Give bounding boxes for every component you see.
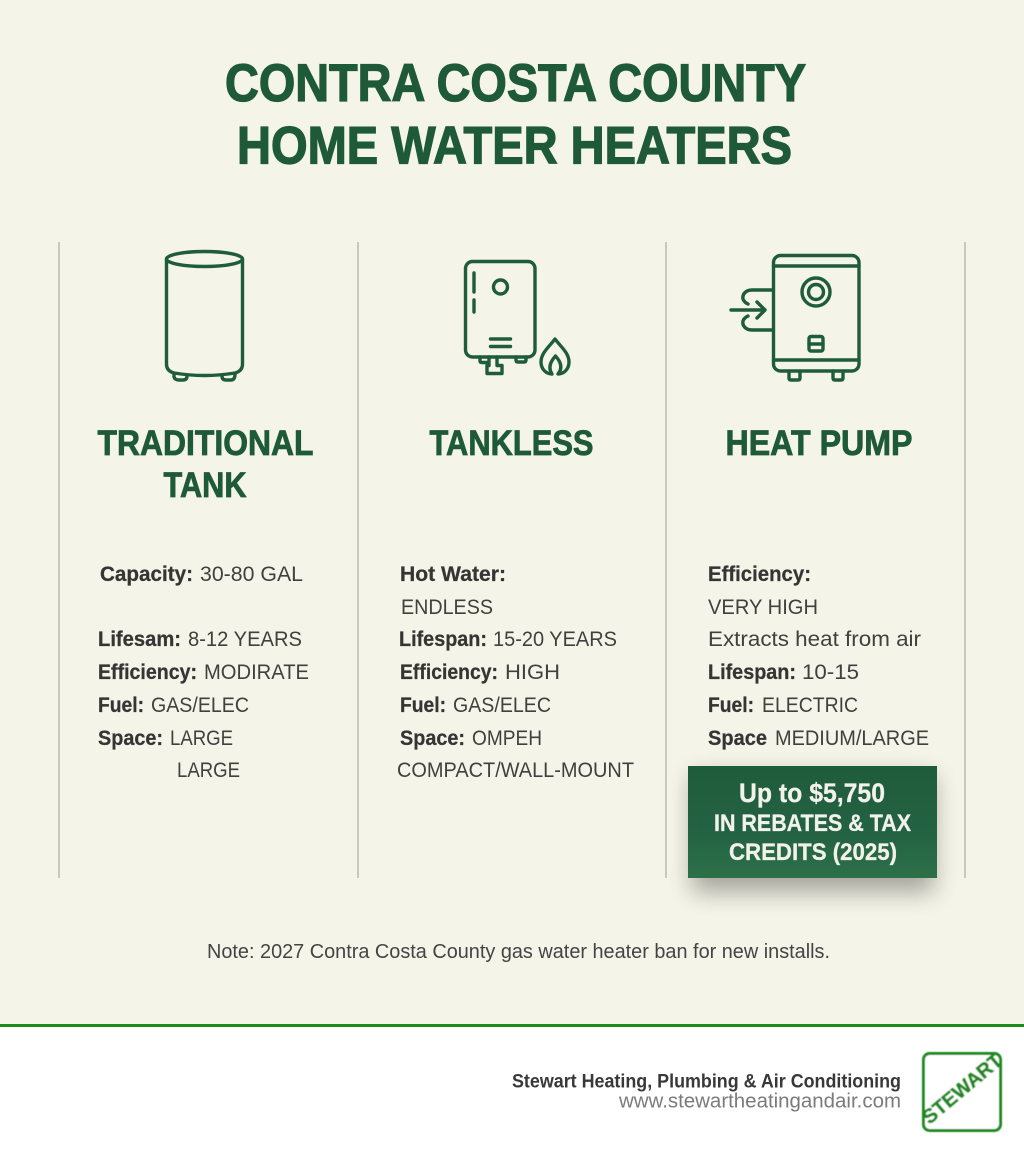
icon: wall unit with flame bbox=[466, 262, 569, 374]
title bbox=[225, 54, 806, 176]
specs: tankless: Space: bbox=[400, 727, 465, 750]
specs: tankless: Fuel: bbox=[400, 694, 446, 717]
specs: traditional tank: Fuel: bbox=[98, 694, 144, 717]
callout: rebates: IN REBATES & TAX bbox=[714, 810, 911, 837]
specs: tankless: OMPEH bbox=[472, 727, 542, 750]
specs: heat pump: Space bbox=[708, 727, 767, 750]
specs: traditional tank: GAS/ELEC bbox=[151, 694, 249, 717]
specs: heat pump: Efficiency: bbox=[708, 563, 811, 586]
icon: cylindrical tank bbox=[166, 252, 242, 380]
logo: Stewart: STEWART bbox=[919, 1050, 1007, 1129]
specs: tankless bbox=[397, 563, 634, 782]
specs: traditional tank: 8-12 YEARS bbox=[188, 628, 302, 651]
title: CONTRA COSTA COUNTY bbox=[225, 54, 806, 113]
specs: heat pump: Lifespan: bbox=[708, 661, 796, 684]
icon: heat pump unit with air arrow bbox=[731, 256, 859, 380]
specs: heat pump bbox=[708, 563, 929, 750]
specs: heat pump: Fuel: bbox=[708, 694, 754, 717]
panel: heat pump bbox=[688, 256, 937, 892]
company name and website bbox=[512, 1072, 901, 1112]
specs: tankless: Efficiency: bbox=[400, 661, 498, 684]
specs: tankless: Hot Water: bbox=[400, 563, 506, 586]
specs: heat pump: MEDIUM/LARGE bbox=[775, 727, 929, 750]
specs: heat pump: 10-15 bbox=[802, 661, 859, 684]
specs: traditional tank: LARGE bbox=[177, 759, 240, 782]
specs: traditional tank: Capacity: bbox=[100, 563, 193, 586]
company name and website: www.stewartheatingandair.com bbox=[618, 1090, 901, 1112]
specs: heat pump: Extracts heat from air bbox=[708, 628, 921, 651]
specs: traditional tank: Lifesam: bbox=[98, 628, 181, 651]
heading: tankless: TANKLESS bbox=[430, 424, 594, 463]
footer bbox=[0, 1024, 1024, 1154]
callout: rebates: CREDITS (2025) bbox=[729, 839, 897, 866]
specs: heat pump: VERY HIGH bbox=[708, 596, 818, 619]
callout: rebates: Up to $5,750 bbox=[739, 778, 885, 808]
specs: traditional tank: MODIRATE bbox=[204, 661, 309, 684]
specs: traditional tank bbox=[98, 563, 309, 782]
specs: tankless: GAS/ELEC bbox=[453, 694, 551, 717]
specs: traditional tank: LARGE bbox=[170, 727, 233, 750]
heading: heat pump: HEAT PUMP bbox=[726, 424, 912, 463]
specs: traditional tank: 30-80 GAL bbox=[200, 563, 303, 586]
specs: tankless: HIGH bbox=[505, 661, 560, 684]
heading: traditional tank: TANK bbox=[164, 466, 246, 505]
specs: tankless: 15-20 YEARS bbox=[493, 628, 617, 651]
specs: heat pump: ELECTRIC bbox=[762, 694, 858, 717]
specs: tankless: Lifespan: bbox=[399, 628, 487, 651]
specs: traditional tank: Efficiency: bbox=[98, 661, 197, 684]
panel: tankless bbox=[397, 262, 634, 782]
heading: traditional tank: TRADITIONAL bbox=[98, 424, 314, 463]
specs: tankless: COMPACT/WALL-MOUNT bbox=[397, 759, 634, 782]
panel: traditional tank bbox=[98, 252, 314, 782]
heading: traditional tank bbox=[98, 424, 314, 505]
specs: tankless: ENDLESS bbox=[401, 596, 493, 619]
note: Note: 2027 Contra Costa County gas water heater ban for new installs. bbox=[207, 941, 830, 963]
company name and website: Stewart Heating, Plumbing & Air Conditioning bbox=[512, 1072, 901, 1092]
title: HOME WATER HEATERS bbox=[237, 116, 792, 176]
callout: rebates bbox=[688, 766, 937, 892]
specs: traditional tank: Space: bbox=[98, 727, 163, 750]
